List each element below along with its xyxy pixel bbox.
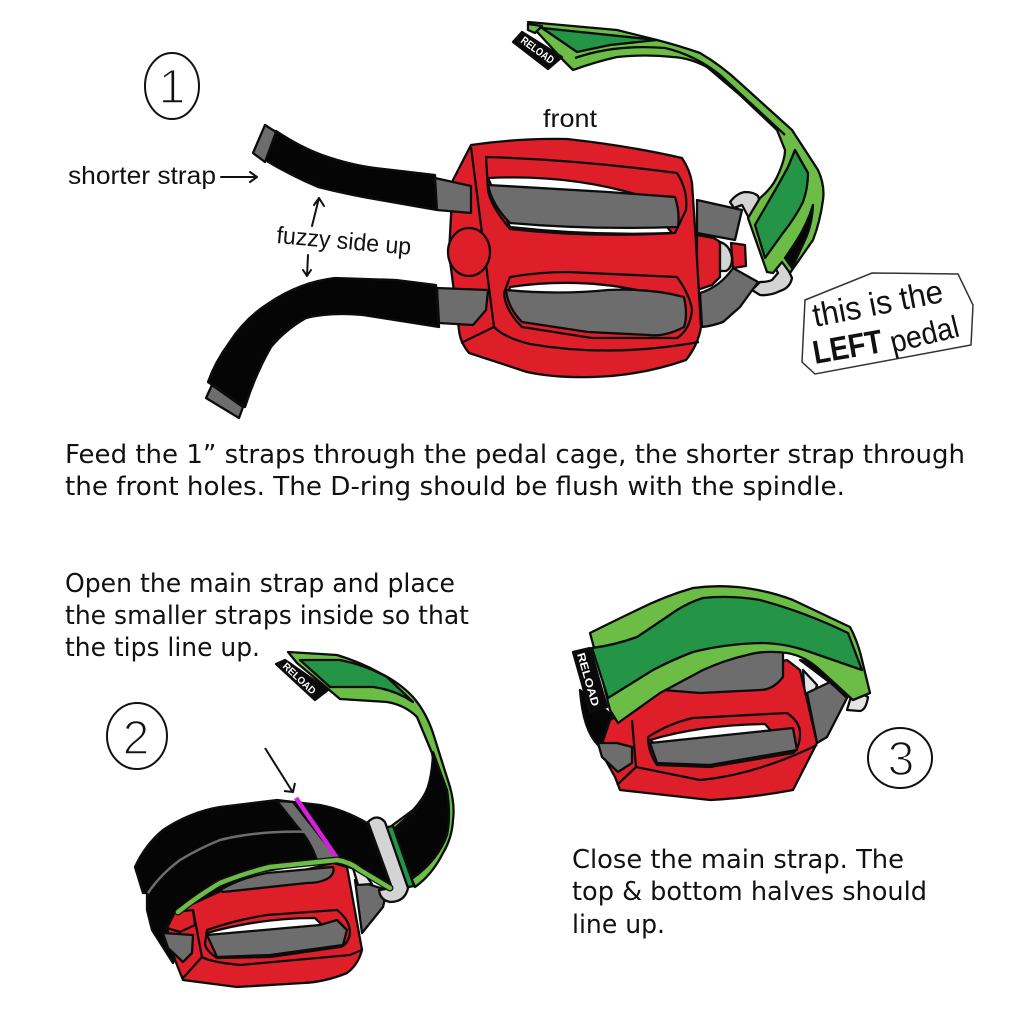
window strap [207,920,347,957]
window opening [650,724,772,748]
step 1 instructions: Feed the 1” straps through the pedal cage, the shorter strap through [65,440,965,470]
step 2 number badge: 2 [123,712,149,765]
black strap edge [800,660,860,700]
label: fuzzy side up: fuzzy side up [275,222,412,261]
label: front: front [543,105,597,133]
step 3 instructions: top & bottom halves should [572,877,927,907]
grey strap above pedal [663,650,783,693]
shorter black strap [265,131,437,210]
arrow: up to strap [312,198,324,226]
lower window [504,272,692,338]
main green strap [528,22,823,273]
RELOAD tag [276,660,328,700]
lower window opening [508,283,654,300]
red pedal body [600,660,817,800]
left grey strap [163,933,193,962]
step 2 instructions: the smaller straps inside so that [65,601,469,631]
lower window strap [506,290,686,335]
upright strap [288,652,454,887]
callout: this is the LEFT pedal: LEFT [810,322,885,371]
step 2 instructions [65,569,469,663]
grey strap tips [277,801,337,860]
shorter strap grey extension [435,178,471,213]
step 2 instructions: the tips line up. [65,633,260,663]
step 1 instructions [65,440,965,502]
left grey strap [598,743,632,772]
spindle nut [731,243,746,268]
callout: this is the LEFT pedal: pedal [886,309,963,360]
step 2 number badge [107,703,167,769]
pedal window [648,713,800,767]
pedal edge lines [461,147,699,351]
upper window opening [488,177,672,234]
step 3 illustration: closed strap [573,586,870,800]
magenta tip line [296,798,337,858]
step 3 instructions: line up. [572,910,665,940]
spindle washer [720,242,732,271]
upper window strap [488,185,679,228]
main strap outer light green [590,586,870,723]
longer strap grey tip [206,385,243,418]
right grey strap [355,880,387,933]
red pedal body [449,139,701,377]
red knob [167,910,195,932]
callout: this is the LEFT pedal: this is the [809,272,946,334]
arrow to tips [265,748,295,792]
RELOAD tag: RELOAD [518,35,556,67]
pedal reflector circle [448,228,490,276]
step 2 instructions: Open the main strap and place [65,569,455,599]
seam line between straps [148,832,313,893]
RELOAD tag: RELOAD [280,661,317,697]
black under strap [580,690,612,745]
window strap [650,728,797,765]
red pedal body [167,863,362,987]
step 3 instructions: Close the main strap. The [572,845,904,875]
D-ring, panel 1 [730,192,792,295]
step 1 instructions: the front holes. The D-ring should be flush with the spindle. [65,472,845,502]
longer strap grey extension [437,288,488,325]
step 1 number badge [145,53,199,119]
green pieces and D-ring [368,818,414,902]
arrow: shorter strap [221,172,257,182]
longer black strap [208,278,439,407]
spindle [697,235,720,290]
pedal edge lines [617,720,817,785]
step 2 illustration: straps inside main strap [135,652,454,987]
white D-ring [847,690,868,711]
main strap inner dark green [592,597,862,698]
white ring piece behind [353,868,372,885]
RELOAD tag [573,648,607,712]
upper window [486,157,686,235]
step 3 number badge [868,728,932,788]
black wrapped straps [135,800,390,963]
grey strap above pedal [220,867,334,892]
label: shorter strap: shorter strap [68,162,216,190]
shorter strap grey tip [253,125,276,162]
window opening [207,918,322,945]
lower-right strap stub [700,268,758,327]
step 1 illustration: pedal with straps [206,22,823,418]
green lining edge [178,860,390,912]
step 3 instructions [572,845,927,940]
white ring piece behind pedal [803,670,817,702]
step 3 number badge: 3 [888,733,914,786]
pedal window [205,910,350,958]
RELOAD tag: RELOAD [574,652,601,708]
step 1 number badge: 1 [159,61,185,114]
callout: this is the LEFT pedal [802,272,973,374]
arrow: down to strap [303,255,311,276]
pedal edge lines [183,910,362,978]
upper-right strap stub [697,200,742,240]
right grey strap [807,682,847,743]
